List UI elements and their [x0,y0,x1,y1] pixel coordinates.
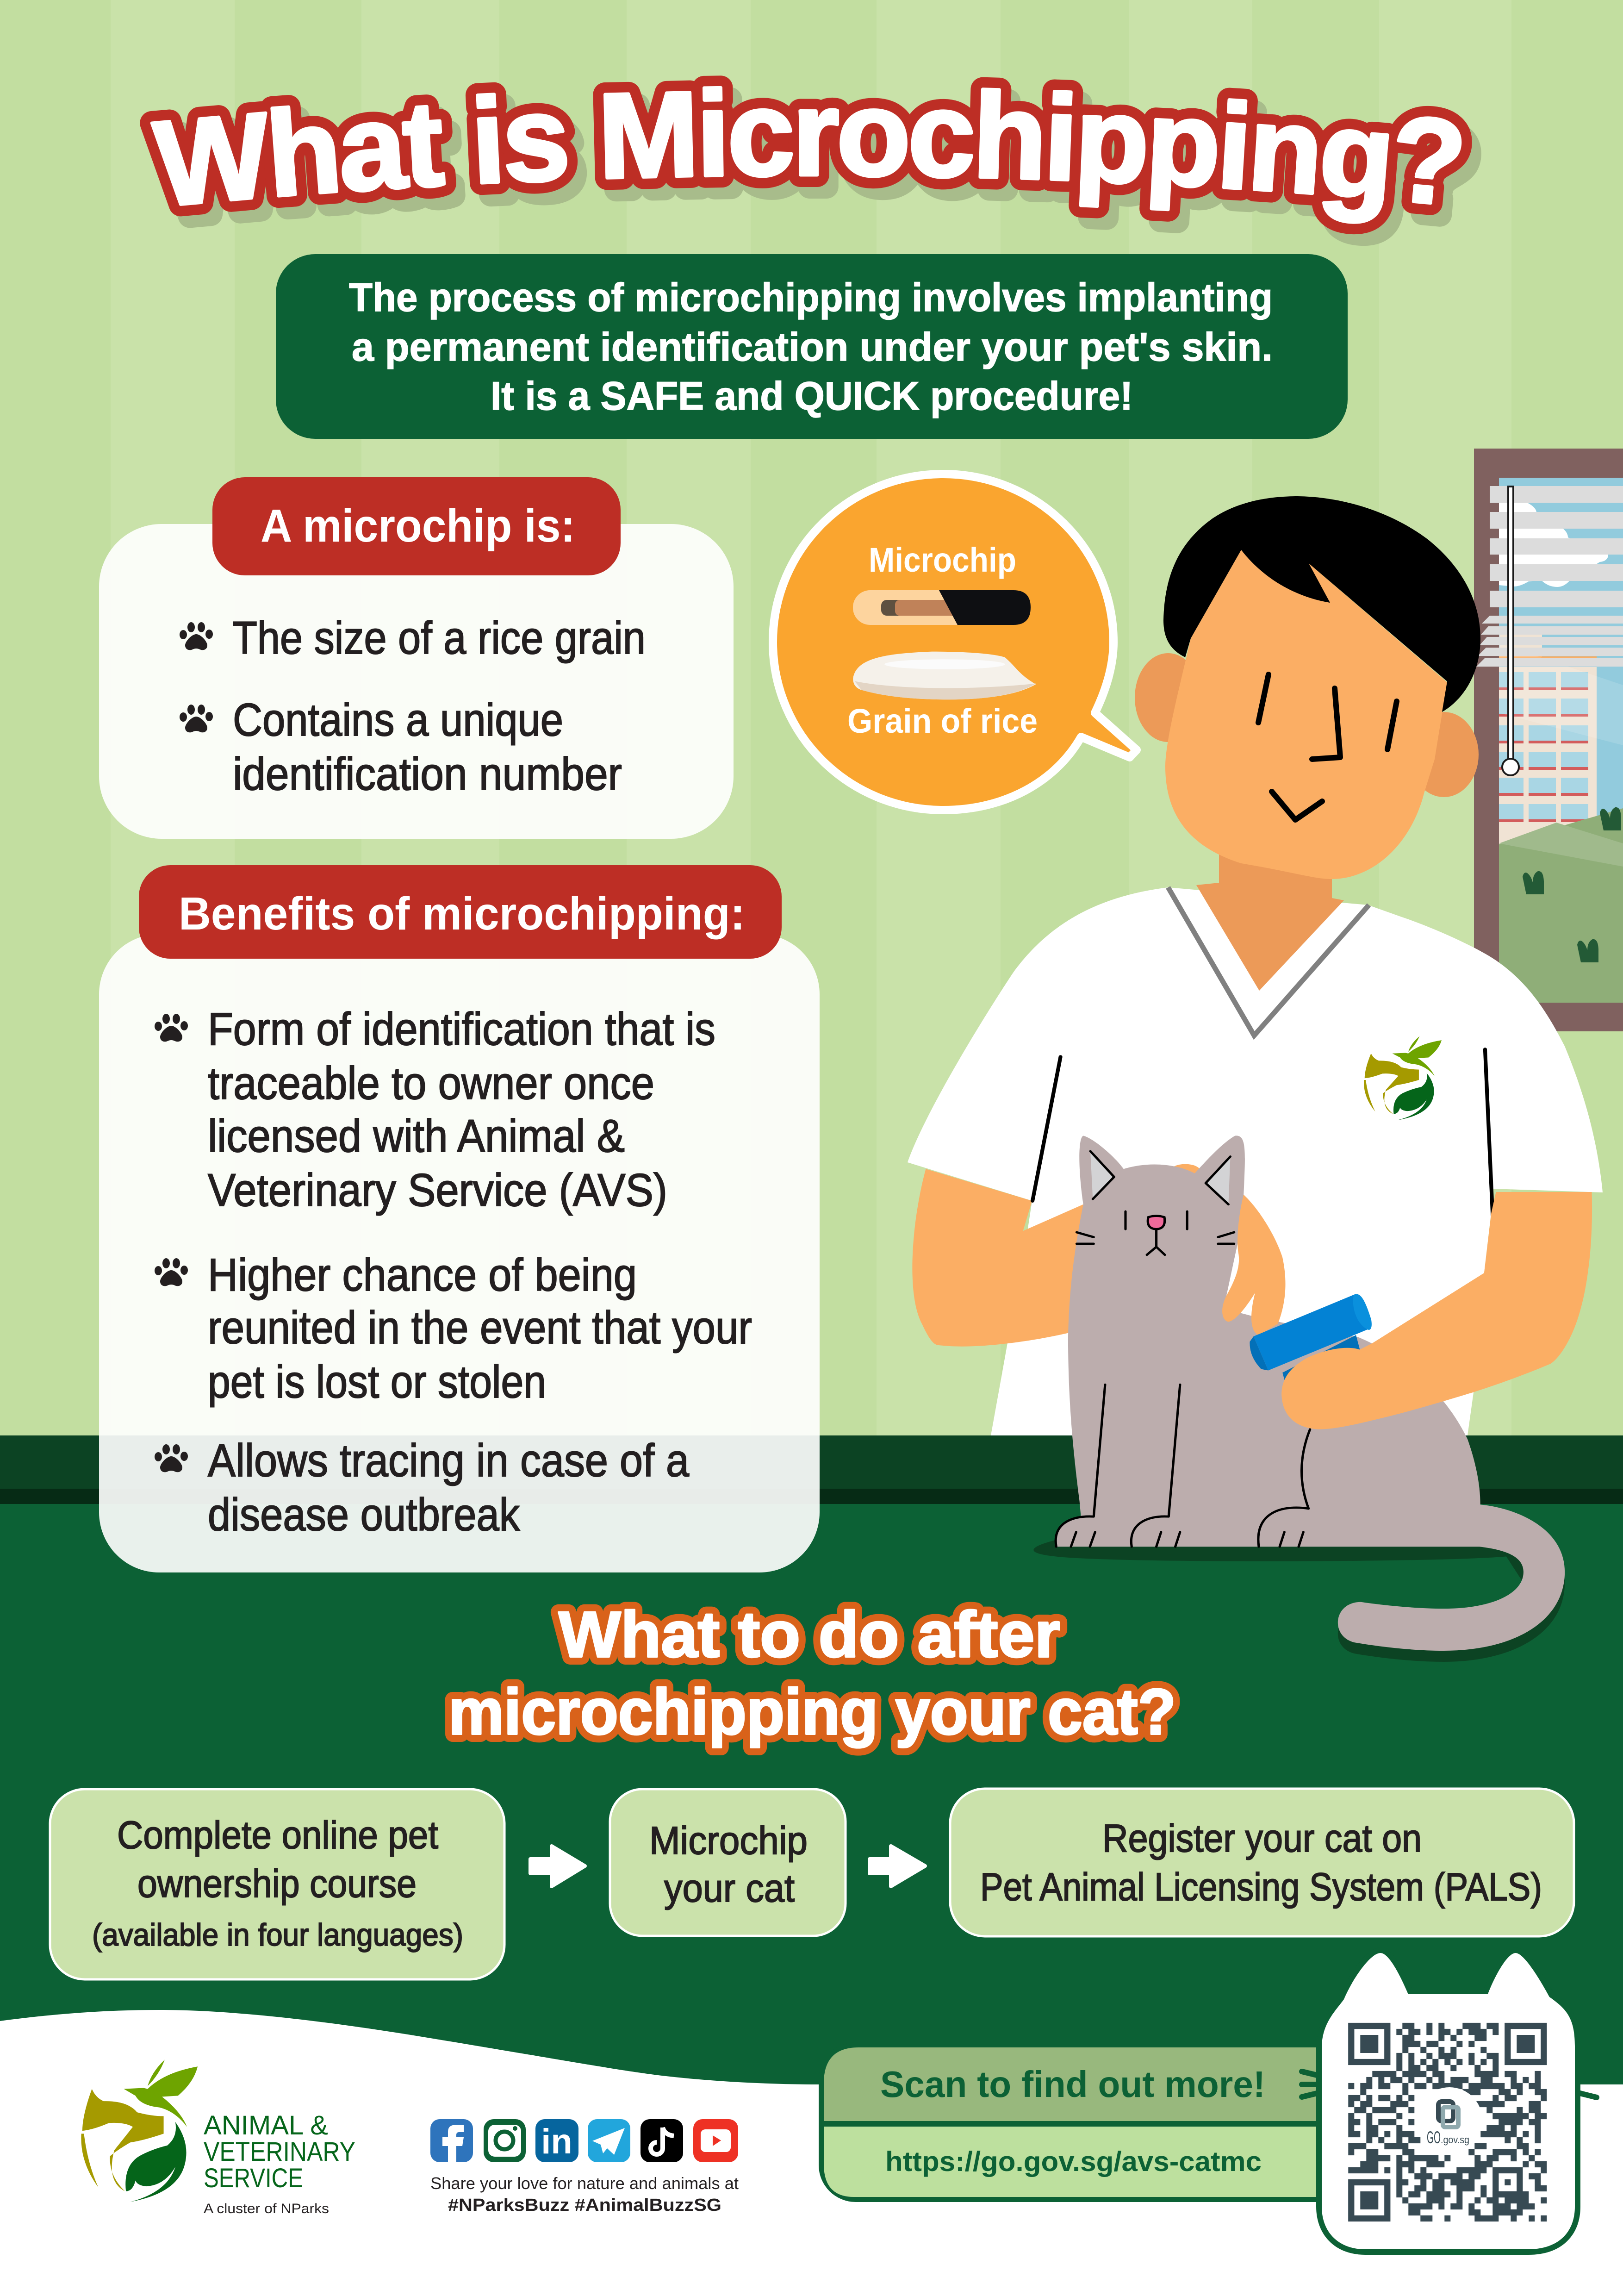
cat legs [1056,1385,1310,1547]
benefit 2: reunited in the event that your [208,1302,752,1353]
tail shadow [1338,1516,1565,1662]
benefit 1: Form of identification that is [208,1003,715,1054]
icon: linkedin: in [541,2122,572,2161]
plants [1523,807,1621,962]
bubble label: grain of rice: Grain of rice [847,702,1038,740]
logo wordmark: VETERINARY [204,2137,355,2167]
arrow [530,1846,585,1886]
url: https://go.gov.sg/avs-catmc [885,2146,1262,2177]
step 3: Pet Animal Licensing System (PALS) [980,1865,1542,1909]
title shadow: What is Microchipping? [159,77,1477,243]
intro text [349,275,1273,418]
clouds [1499,503,1608,587]
sleeve lines [1032,1049,1492,1216]
heading tag: A microchip is: [261,500,575,552]
icon: youtube [693,2119,738,2162]
logo mark [81,2059,198,2202]
step 3 [950,1789,1574,1936]
step 3: Register your cat on [1102,1816,1422,1860]
collar lines [1168,887,1369,1036]
icon: microchip [853,590,1031,625]
benefit 3: disease outbreak [208,1489,520,1540]
bullets [180,612,646,799]
logo wordmark: ANIMAL & [204,2110,328,2140]
benefit 2: pet is lost or stolen [208,1356,546,1407]
subheading: What to do after [559,1598,1060,1671]
benefit 1: licensed with Animal & [208,1110,625,1161]
AVS logo [81,2059,355,2216]
floor [0,1435,1623,2106]
heading tag [212,477,621,575]
subheading: What to do after [559,1598,1060,1671]
vet: body, neck and head [908,496,1603,1435]
blinds [1476,486,1623,667]
intro text: The process of microchipping involves implanting [349,275,1273,320]
panel: a microchip is [99,477,734,839]
arrow [870,1846,925,1886]
social icons [430,2119,738,2162]
benefit 3 [155,1435,690,1540]
background stripes [0,0,1623,1435]
step 1: ownership course [137,1862,417,1905]
bullets: identification number [233,748,622,799]
benefit 2: Higher chance of being [208,1249,637,1300]
ears [1135,653,1479,797]
social caption: Share your love for nature and animals at [430,2174,739,2193]
QR centre badge: GO [1427,2128,1441,2147]
vet hand on cat [1222,1195,1285,1335]
window with blinds [1474,449,1623,1031]
hill [1499,808,1623,1003]
icon: tiktok [640,2119,683,2162]
benefit 1: Veterinary Service (AVS) [208,1164,667,1216]
vet right arm [1281,1192,1592,1429]
benefit 2 [155,1249,752,1407]
benefit 1 [155,1003,715,1216]
title: What is Microchipping? [149,65,1468,232]
shirt logo [1364,1036,1442,1120]
heading tag [139,865,782,959]
cat whiskers [1302,2071,1597,2097]
logo tagline: A cluster of NParks [204,2201,329,2216]
icon: linkedin [535,2119,578,2162]
cat ears [1090,1151,1230,1204]
step 1 [50,1789,504,1979]
bullets: Contains a unique [233,694,563,745]
blind cord [1502,487,1519,775]
vet left arm [912,1169,1083,1347]
intro panel [276,254,1348,439]
subheading: microchipping your cat? [448,1675,1176,1748]
QR centre badge: .gov.sg [1441,2134,1469,2146]
icon: facebook [430,2119,473,2162]
QR cat [1322,1953,1575,2249]
panel: benefits [99,865,820,1572]
microchip scanner [1250,1294,1372,1386]
bubble label: microchip: Microchip [869,541,1016,579]
face [1165,550,1447,879]
speech bubble [773,474,1137,810]
step 1: (available in four languages) [92,1917,463,1953]
footer wave [0,2010,1623,2296]
cat shadow [1033,1540,1515,1561]
title: What is Microchipping? [149,65,1468,232]
facial features [1258,674,1397,820]
intro text: It is a SAFE and QUICK procedure! [491,374,1133,418]
heading tag: Benefits of microchipping: [179,888,745,940]
social caption [430,2174,739,2215]
icon: telegram [588,2119,630,2162]
cat and vet arms [912,1049,1592,1662]
logo wordmark [204,2110,355,2193]
benefit 1: traceable to owner once [208,1057,654,1109]
scan heading: Scan to find out more! [880,2064,1265,2105]
icon: instagram [484,2119,526,2162]
shirt [908,887,1603,1435]
logo wordmark: SERVICE [204,2163,303,2193]
intro text: a permanent identification under your pet's skin. [352,325,1273,369]
neck [1196,852,1344,991]
QR code [1348,2026,1547,2218]
subheading [448,1598,1176,1748]
step 1: Complete online pet [117,1813,438,1857]
step 2 [610,1789,846,1936]
cat face [1076,1211,1234,1255]
cat body [1055,1136,1565,1651]
QR centre badge [1417,2087,1482,2153]
step 2: your cat [664,1866,795,1910]
icon: grain of rice [853,652,1036,699]
subheading: microchipping your cat? [448,1675,1176,1748]
step 2: Microchip [649,1819,808,1862]
social caption: #NParksBuzz #AnimalBuzzSG [448,2196,721,2215]
building [1499,635,1623,845]
benefit 3: Allows tracing in case of a [208,1435,690,1486]
bullets: The size of a rice grain [232,612,646,663]
scan panel [819,2042,1356,2202]
hair [1163,496,1480,712]
